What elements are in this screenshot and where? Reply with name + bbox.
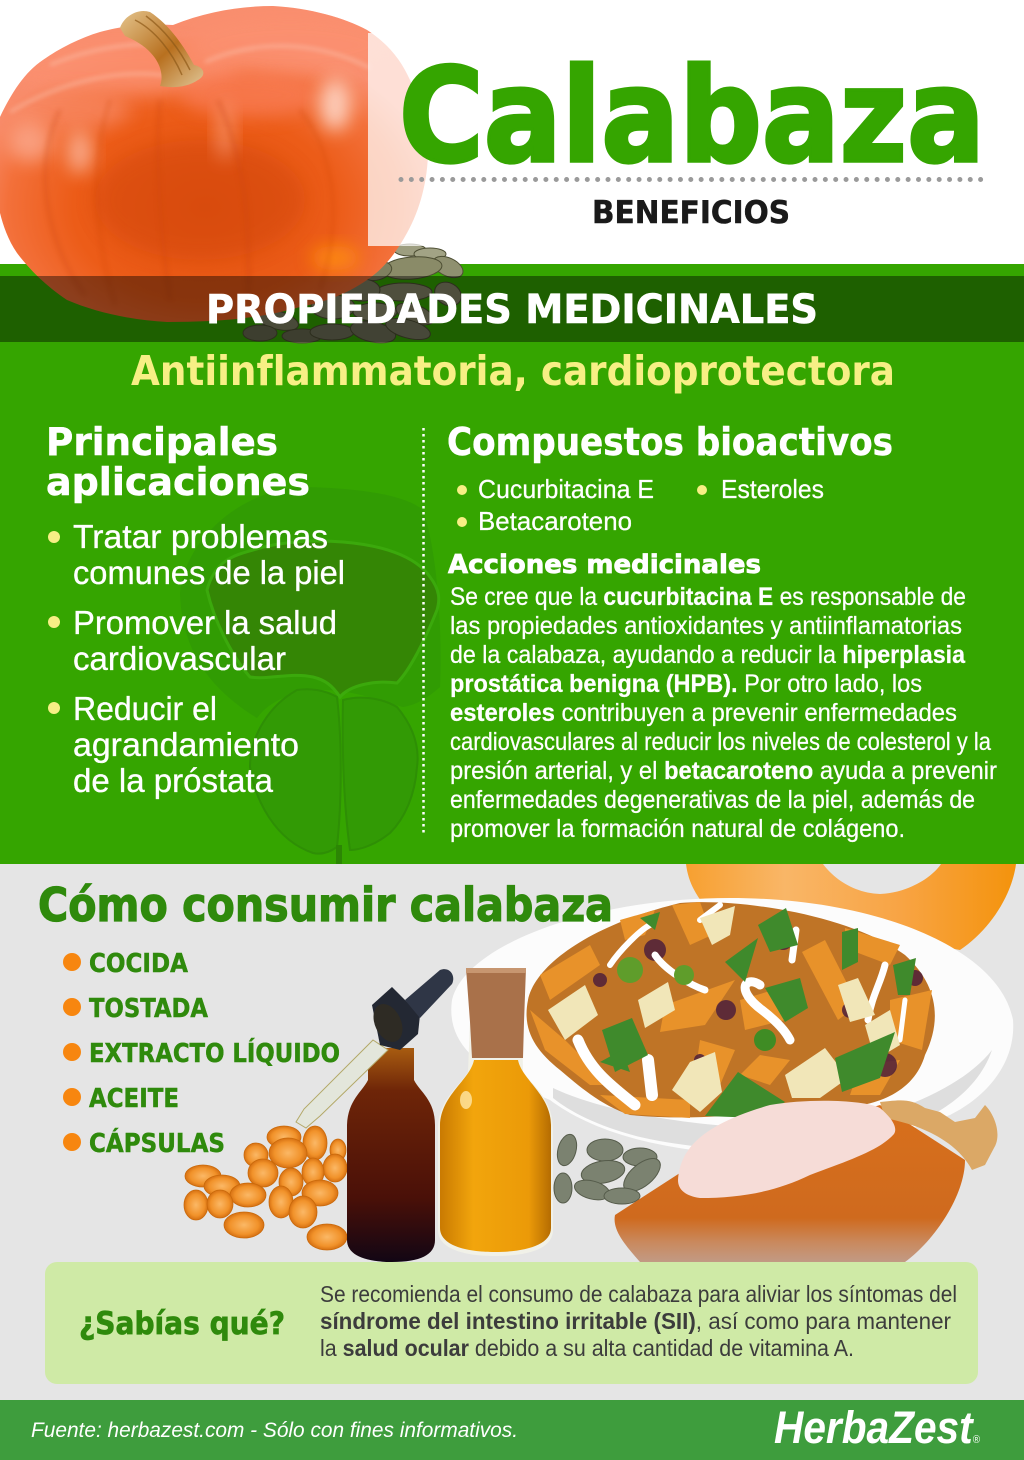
callout text: síndrome del intestino irritable (SII), así como para mantener [320,1308,951,1334]
icon: capsules [184,1126,347,1250]
whipped cream [678,1101,895,1198]
text block: medicinal actions: promover la formación natural de colágeno. [450,815,905,843]
list: compounds [457,474,824,536]
text block: medicinal actions: prostática benigna (HPB). Por otro lado, los [450,670,922,698]
text block: medicinal actions: enfermedades degenerativas de la piel, además de [450,786,975,814]
list: applications: Tratar problemas [73,518,328,555]
callout text: la salud ocular debido a su alta cantidad de vitamina A. [320,1335,854,1361]
list: consumption forms: EXTRACTO LÍQUIDO [89,1037,340,1069]
list: compounds: Betacaroteno [478,506,632,536]
icon: pumpkin [0,0,435,330]
list: applications: Reducir el [73,690,217,727]
heading: medicinal properties: PROPIEDADES MEDICINALES [206,287,818,333]
icon: amber oil bottle [438,968,553,1256]
icon: pumpkin slice ring [686,864,1016,950]
list: consumption forms: ACEITE [89,1084,179,1114]
icon: seeds behind pumpkin [243,244,466,347]
seeds under plate [554,1132,666,1204]
list: applications: comunes de la piel [73,554,345,591]
list: applications: cardiovascular [73,640,286,677]
text block: medicinal actions [450,583,997,843]
plate [451,898,1013,1155]
icon: cork [466,968,526,1058]
panel: bioactive compounds [447,420,997,843]
list: applications: de la próstata [73,762,274,799]
list: compounds: Esteroles [721,474,824,504]
bullet circles [63,953,81,1151]
text block: medicinal actions: esteroles contribuyen a prevenir enfermedades [450,699,957,727]
heading: how to consume: Cómo consumir calabaza [38,878,613,932]
dropper [296,969,453,1128]
logo: HerbaZest: HerbaZest® [774,1402,981,1453]
list: applications [48,518,345,799]
dark heading band [0,276,1024,342]
dotted rule under title [401,177,984,182]
crust [880,1100,997,1170]
illustration: prostate watermark [180,487,441,864]
list: compounds: Cucurbitacina E [478,474,654,504]
list: consumption forms: COCIDA [89,949,188,979]
list: applications: Promover la salud [73,604,337,641]
subtitle: BENEFICIOS [592,195,790,231]
green panel: medicinal properties [0,264,1024,864]
list: consumption forms: TOSTADA [89,994,208,1024]
icon: pumpkin stem [120,11,203,87]
text block: medicinal actions: Se cree que la cucurbitacina E es responsable de [450,583,966,611]
text block: medicinal actions: las propiedades antioxidantes y antiinflamatorias [450,612,962,640]
heading: main applications: aplicaciones [46,460,310,504]
footer source: Fuente: herbazest.com - Sólo con fines informativos. [31,1419,518,1442]
panel: main applications [46,420,345,799]
footer bar [0,1400,1024,1460]
heading: bioactive compounds: Compuestos bioactivos [447,420,893,464]
list: consumption forms [63,949,340,1159]
text block: medicinal actions: de la calabaza, ayudando a reducir la hiperplasia [450,641,966,669]
icon: pumpkin pie slice [615,1100,997,1262]
translucent white overlay behind title [368,33,1024,246]
callout text: Se recomienda el consumo de calabaza para aliviar los síntomas del [320,1281,957,1307]
heading: medicinal actions: Acciones medicinales [448,550,761,580]
list: applications: agrandamiento [73,726,299,763]
list: consumption forms: CÁPSULAS [89,1127,225,1159]
callout heading: ¿Sabías qué? [79,1306,285,1342]
panel: how to consume background [0,864,1024,1400]
callout: did you know [45,1262,978,1384]
icon: brown dropper bottle [296,969,453,1262]
divider [422,428,425,836]
roasted pumpkin [527,902,935,1117]
icon: plate with roasted pumpkin salad [451,898,1013,1155]
text block: medicinal actions: presión arterial, y el betacaroteno ayuda a prevenir [450,757,997,785]
subheading: properties: Antiinflammatoria, cardioprotectora [131,347,895,395]
callout text [320,1281,957,1361]
heading: main applications: Principales [46,420,278,464]
